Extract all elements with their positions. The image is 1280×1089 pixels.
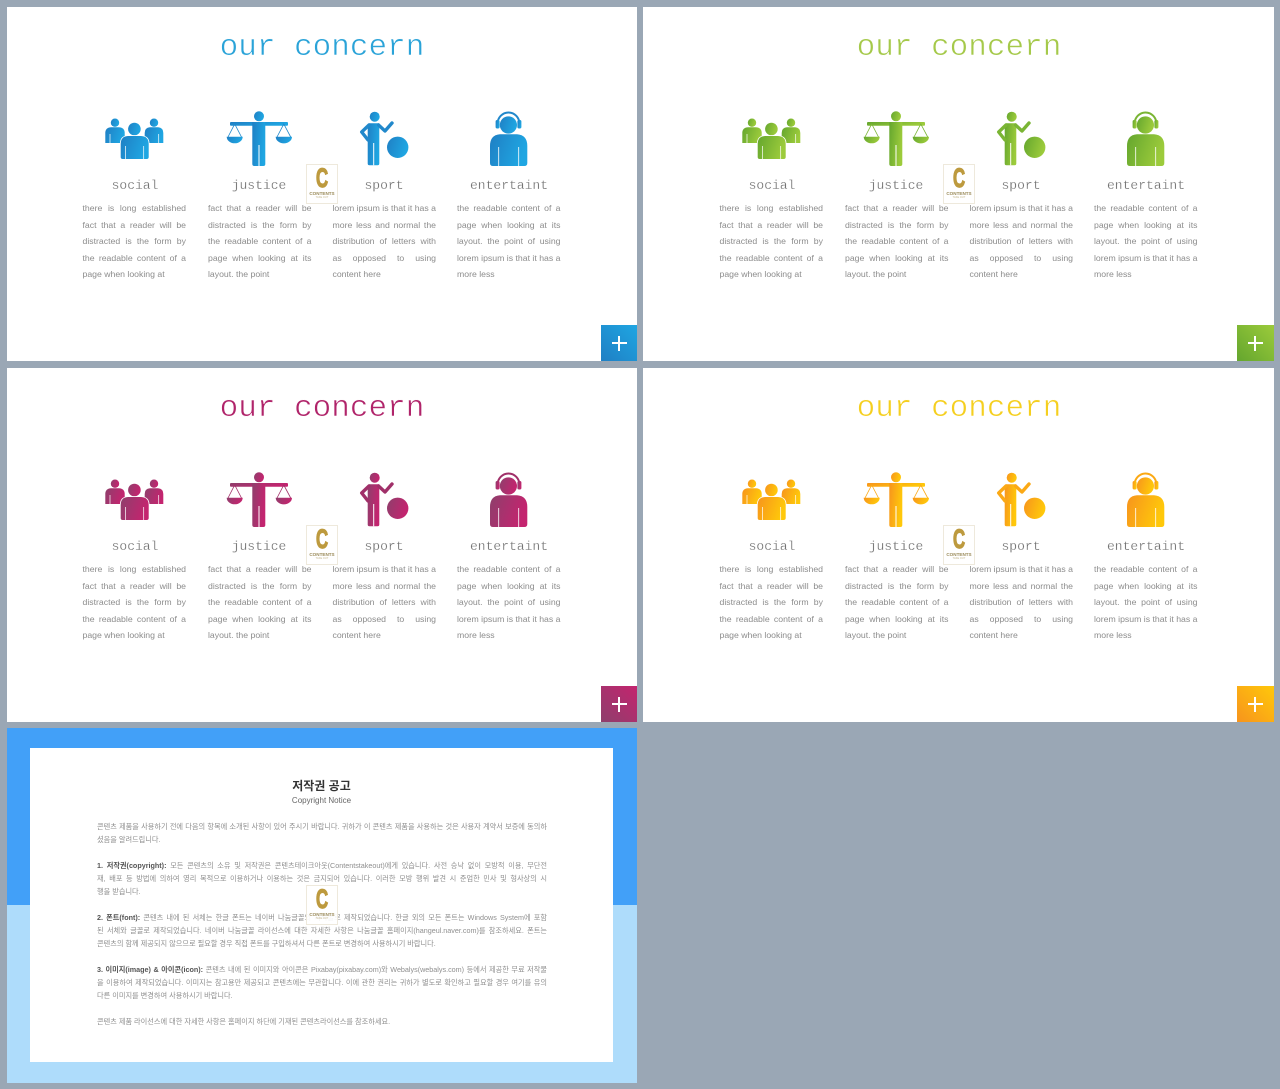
- plus button: [601, 686, 637, 722]
- label: social: social: [749, 178, 795, 193]
- label: social: social: [749, 539, 795, 554]
- text: justice: the readable content of a: [845, 597, 948, 607]
- panel: blue our concern: [7, 7, 637, 361]
- label: justice: justice: [869, 539, 923, 554]
- notice body text: 다른 이미지를 변경하여 사용하시기 바랍니다.: [97, 991, 233, 1000]
- icon: justice: [227, 472, 292, 527]
- text: justice: the readable content of a: [208, 597, 312, 607]
- icon: justice: [864, 111, 929, 166]
- text: sport: content here: [332, 630, 381, 640]
- text: sport: more less and normal the: [332, 581, 436, 591]
- text: sport: as opposed to using: [970, 614, 1073, 624]
- text: social: the readable content of a: [82, 253, 186, 263]
- notice card: [30, 748, 613, 1062]
- text: social: distracted is the form by: [82, 597, 186, 607]
- icon: social: [105, 480, 163, 520]
- notice heading: 저작권 공고: [292, 779, 351, 793]
- text: sport: lorem ipsum is that it has a: [970, 564, 1073, 574]
- text: social: there is long established: [82, 203, 186, 213]
- text: justice: distracted is the form by: [208, 220, 312, 230]
- label: justice: justice: [232, 178, 286, 193]
- label: entertaint: entertaint: [470, 178, 548, 193]
- notice body text: 콘텐츠 제품을 사용하기 전에 다음의 항목에 소개된 사항이 있어 주시기 바랍니다. 귀하가 이 콘텐츠 제품을 사용하는 것은 사용자 계약서 보증에 동의하: [97, 822, 547, 831]
- watermark: TAKE OUT: [953, 196, 965, 199]
- text: sport: more less and normal the: [332, 220, 436, 230]
- text: entertaint: [1094, 564, 1198, 640]
- text: justice: fact that a reader will be: [845, 564, 948, 574]
- text: sport: as opposed to using: [970, 253, 1073, 263]
- notice body text: 을 이용하여 제작되었습니다. 이미지는 참고용만 제공되고 콘텐츠에는 무관합니다. 이에 관한 권리는 귀하가 별도로 확인하고 필요할 경우 여기를 유의: [97, 978, 547, 987]
- label: sport: sport: [1001, 539, 1040, 554]
- text: social: [82, 203, 186, 279]
- watermark: TAKE OUT: [953, 557, 965, 560]
- text: social: the readable content of a: [720, 614, 823, 624]
- icon: entertaint: [490, 474, 527, 527]
- text: social: distracted is the form by: [82, 236, 186, 246]
- text: sport: more less and normal the: [970, 581, 1073, 591]
- notice body text: 재, 배포 등 방법에 의하여 영리 목적으로 이용하거나 이용하는 것은 금지되어 있습니다. 이러한 모방 행위 발견 시 준엄한 민사 및 형사상의 시: [97, 874, 547, 883]
- text: entertaint: layout. the point of using: [457, 236, 560, 246]
- watermark: [306, 164, 338, 204]
- text: justice: page when looking at its: [208, 614, 312, 624]
- text: social: [82, 564, 186, 640]
- text: social: distracted is the form by: [720, 236, 823, 246]
- text: entertaint: [457, 203, 560, 279]
- text: entertaint: the readable content of a: [457, 203, 560, 213]
- text: social: the readable content of a: [82, 614, 186, 624]
- panel: yellow our concern: [644, 368, 1274, 722]
- text: entertaint: the readable content of a: [1094, 203, 1198, 213]
- text: justice: page when looking at its: [845, 614, 948, 624]
- text: social: page when looking at: [82, 630, 165, 640]
- label: entertaint: entertaint: [1107, 539, 1185, 554]
- text: justice: [845, 564, 948, 640]
- notice body text: 콘텐츠 제품 라이선스에 대한 자세한 사항은 홈페이지 하단에 기재된 콘텐츠라이선스를 참조하세요.: [97, 1017, 390, 1026]
- text: entertaint: more less: [1094, 630, 1132, 640]
- text: sport: content here: [970, 269, 1018, 279]
- text: entertaint: layout. the point of using: [1094, 236, 1198, 246]
- text: entertaint: [1094, 203, 1198, 279]
- icon: justice: [227, 111, 292, 166]
- text: justice: [845, 203, 948, 279]
- watermark: CONTENTS: [946, 191, 972, 196]
- title: our concern: [220, 391, 424, 426]
- watermark: [306, 885, 338, 925]
- text: entertaint: lorem ipsum is that it has a: [457, 253, 560, 263]
- text: justice: distracted is the form by: [208, 581, 312, 591]
- text: sport: content here: [970, 630, 1018, 640]
- text: justice: fact that a reader will be: [845, 203, 948, 213]
- label: sport: sport: [364, 539, 404, 554]
- notice body text: 콘텐츠의 함께 제공되지 않으므로 필요할 경우 직접 폰트를 구입하셔서 다른 폰트로 변경하여 사용하시기 바랍니다.: [97, 939, 436, 948]
- icon: entertaint: [1127, 112, 1164, 166]
- text: justice: layout. the point: [208, 269, 269, 279]
- text: social: fact that a reader will be: [82, 220, 186, 230]
- text: social: fact that a reader will be: [720, 581, 823, 591]
- watermark: TAKE OUT: [316, 917, 328, 920]
- notice body text: 3. 이미지(image) & 아이콘(icon): 콘텐츠 내에 된 이미지와 아이콘은 Pixabay(pixabay.com)와 Webalys(webalys.com) 등에서 제공한 무료 저작물: [97, 965, 547, 974]
- label: entertaint: entertaint: [470, 539, 548, 554]
- text: justice: layout. the point: [845, 269, 906, 279]
- watermark: [943, 164, 975, 204]
- text: social: fact that a reader will be: [720, 220, 823, 230]
- watermark: TAKE OUT: [316, 196, 328, 199]
- text: entertaint: lorem ipsum is that it has a: [457, 614, 560, 624]
- text: social: page when looking at: [720, 269, 802, 279]
- text: social: there is long established: [720, 203, 823, 213]
- notice body text: 행을 받습니다.: [97, 887, 141, 896]
- text: entertaint: lorem ipsum is that it has a: [1094, 614, 1198, 624]
- panel: green our concern: [644, 7, 1274, 361]
- text: social: page when looking at: [82, 269, 165, 279]
- text: sport: lorem ipsum is that it has a: [332, 203, 436, 213]
- text: entertaint: page when looking at its: [457, 220, 560, 230]
- text: sport: lorem ipsum is that it has a: [332, 564, 436, 574]
- text: social: page when looking at: [720, 630, 802, 640]
- notice body text: [97, 822, 547, 1026]
- watermark: [943, 525, 975, 565]
- text: justice: layout. the point: [208, 630, 269, 640]
- text: sport: lorem ipsum is that it has a: [970, 203, 1073, 213]
- text: sport: content here: [332, 269, 381, 279]
- text: sport: [332, 203, 436, 279]
- label: social: social: [112, 539, 158, 554]
- text: sport: more less and normal the: [970, 220, 1073, 230]
- icon: sport: [999, 112, 1045, 165]
- text: social: [720, 203, 823, 279]
- text: sport: as opposed to using: [332, 253, 436, 263]
- icon: entertaint: [490, 112, 527, 166]
- text: social: there is long established: [82, 564, 186, 574]
- panel: copyright notice: [7, 728, 637, 1083]
- icon: social: [742, 480, 800, 520]
- plus button: [1237, 686, 1274, 722]
- text: entertaint: layout. the point of using: [457, 597, 560, 607]
- watermark: CONTENTS: [946, 552, 972, 557]
- title: our concern: [857, 30, 1061, 65]
- icon: sport: [999, 473, 1045, 526]
- icon: social: [742, 118, 800, 159]
- text: sport: distribution of letters with: [332, 236, 436, 246]
- plus button: [601, 325, 637, 361]
- text: social: distracted is the form by: [720, 597, 823, 607]
- title: our concern: [857, 391, 1061, 426]
- icon: social: [105, 118, 163, 159]
- watermark: CONTENTS: [309, 191, 335, 196]
- text: entertaint: more less: [1094, 269, 1132, 279]
- notice body text: 2. 폰트(font): 콘텐츠 내에 된 서체는 한글 폰트는 네이버 나눔글꼴의 저작물로 제작되었습니다. 한글 외의 모든 폰트는 Windows System에 포함: [97, 913, 547, 922]
- text: social: [720, 564, 823, 640]
- text: social: the readable content of a: [720, 253, 823, 263]
- text: justice: [208, 203, 312, 279]
- label: sport: sport: [1001, 178, 1040, 193]
- text: justice: [208, 564, 312, 640]
- text: justice: layout. the point: [845, 630, 906, 640]
- watermark: CONTENTS: [309, 552, 335, 557]
- notice body text: 된 서체와 글꼴로 제작되었습니다. 네이버 나눔글꼴 라이선스에 대한 자세한 사항은 나눔글꼴 홈페이지(hangeul.naver.com)를 참조하세요. 폰트는: [97, 926, 547, 935]
- title: our concern: [220, 30, 424, 65]
- text: entertaint: page when looking at its: [1094, 581, 1198, 591]
- watermark: TAKE OUT: [316, 557, 328, 560]
- text: justice: fact that a reader will be: [208, 203, 312, 213]
- text: entertaint: more less: [457, 630, 495, 640]
- label: entertaint: entertaint: [1107, 178, 1185, 193]
- label: justice: justice: [869, 178, 923, 193]
- text: sport: [332, 564, 436, 640]
- text: social: there is long established: [720, 564, 823, 574]
- text: justice: the readable content of a: [845, 236, 948, 246]
- icon: sport: [362, 112, 408, 165]
- text: justice: fact that a reader will be: [208, 564, 312, 574]
- text: entertaint: [457, 564, 560, 640]
- text: justice: the readable content of a: [208, 236, 312, 246]
- label: sport: sport: [364, 178, 404, 193]
- icons: [105, 111, 528, 166]
- text: entertaint: lorem ipsum is that it has a: [1094, 253, 1198, 263]
- text: sport: [970, 564, 1073, 640]
- watermark: CONTENTS: [309, 912, 335, 917]
- plus button: [1237, 325, 1274, 361]
- text: justice: distracted is the form by: [845, 581, 948, 591]
- text: justice: distracted is the form by: [845, 220, 948, 230]
- icon: justice: [864, 472, 929, 527]
- text: sport: [970, 203, 1073, 279]
- label: social: social: [112, 178, 158, 193]
- text: sport: distribution of letters with: [970, 597, 1073, 607]
- text: sport: distribution of letters with: [332, 597, 436, 607]
- icons: [105, 472, 528, 527]
- notice body text: 1. 저작권(copyright): 모든 콘텐츠의 소유 및 저작권은 콘텐츠테이크아웃(Contentstakeout)에게 있습니다. 사전 승낙 없이 모방적 이용, 무단전: [97, 861, 547, 870]
- text: justice: page when looking at its: [208, 253, 312, 263]
- icons: [742, 111, 1164, 166]
- watermark: [306, 525, 338, 565]
- text: entertaint: more less: [457, 269, 495, 279]
- label: justice: justice: [232, 539, 286, 554]
- text: entertaint: layout. the point of using: [1094, 597, 1198, 607]
- text: sport: distribution of letters with: [970, 236, 1073, 246]
- icon: entertaint: [1127, 474, 1164, 527]
- notice body text: 셨음을 알려드립니다.: [97, 835, 161, 844]
- text: entertaint: page when looking at its: [457, 581, 560, 591]
- text: entertaint: the readable content of a: [1094, 564, 1198, 574]
- icon: sport: [362, 473, 408, 526]
- panel: magenta our concern: [7, 368, 637, 722]
- icons: [742, 472, 1164, 527]
- text: justice: page when looking at its: [845, 253, 948, 263]
- notice subheading: Copyright Notice: [292, 796, 351, 805]
- text: sport: as opposed to using: [332, 614, 436, 624]
- text: entertaint: page when looking at its: [1094, 220, 1198, 230]
- text: social: fact that a reader will be: [82, 581, 186, 591]
- text: entertaint: the readable content of a: [457, 564, 560, 574]
